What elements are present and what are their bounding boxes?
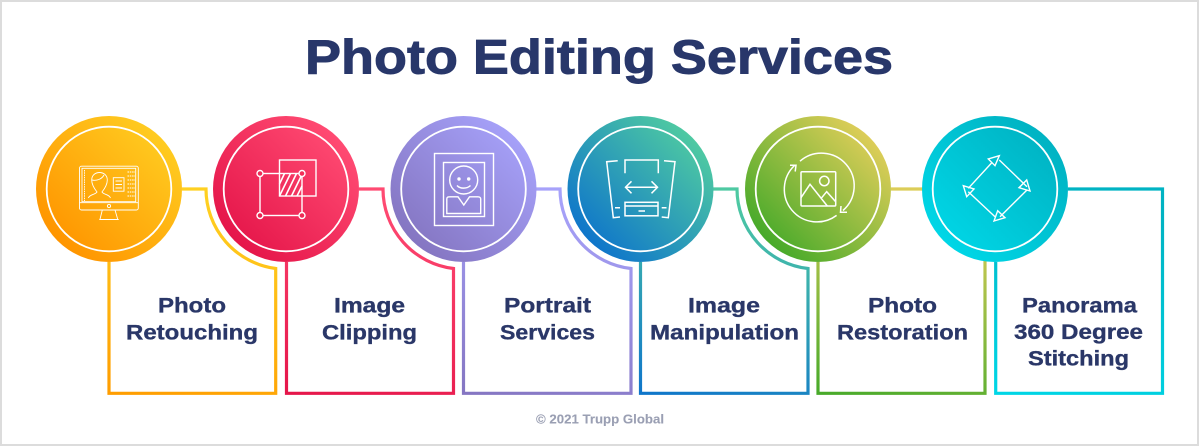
label: Photo Restoration: Restoration [837,322,968,344]
ring 6 [933,127,1057,251]
icon: restore picture [784,153,854,222]
label: Portrait Services: Services [500,322,595,344]
ring 5 [756,127,880,251]
label: Panorama 360 Degree Stitching: Stitching [1028,348,1129,370]
label: Image Manipulation: Image [688,294,760,318]
label: Portrait Services [500,294,595,344]
ring 3 [401,127,526,251]
circle 6 [922,116,1068,262]
label: Photo Retouching: Retouching [126,322,258,344]
panel: Image Clipping [213,116,454,393]
label: Image Clipping: Image [334,294,405,318]
panel: Portrait Services [390,116,631,393]
connector and box 1 [109,189,276,393]
label: Image Manipulation [650,294,799,344]
panel: Photo Restoration [745,116,985,393]
panel: Photo Retouching [36,116,276,393]
circle 5 [745,116,891,262]
ring 4 [578,127,703,251]
circle 3 [390,116,536,262]
ring 1 [47,127,171,251]
label: Panorama 360 Degree Stitching: 360 Degree [1014,321,1143,344]
label: Photo Retouching: Photo [158,294,226,318]
label: Image Manipulation: Manipulation [650,322,799,344]
label: Image Clipping: Clipping [322,322,417,344]
circle 1 [36,116,182,262]
label: Panorama 360 Degree Stitching: Panorama [1022,294,1137,318]
label: Photo Restoration: Photo [868,294,937,318]
panel: Panorama 360 Degree Stitching [922,116,1162,393]
panel: Image Manipulation [568,116,808,393]
icon: resize frame [607,160,675,218]
circle 4 [568,116,714,262]
connector and box 3 [464,189,631,393]
ring 2 [224,127,348,251]
title: Photo Editing Services [305,32,893,84]
connector and box 2 [286,189,454,393]
label: Panorama 360 Degree Stitching [1014,294,1143,370]
copyright: © 2021 Trupp Global [536,412,664,426]
label: Photo Restoration [837,294,968,344]
connector and box 6 [996,189,1162,393]
icon: diamond arrows [963,156,1030,221]
label: Portrait Services: Portrait [504,294,591,318]
icon: clipping squares [257,160,316,218]
icon: framed portrait [434,154,494,226]
connector and box 4 [640,189,808,393]
connector and box 5 [818,189,985,393]
circle 2 [213,116,359,262]
icon: monitor with portrait [80,166,138,220]
label: Image Clipping [322,294,417,344]
label: Photo Retouching [126,294,258,344]
